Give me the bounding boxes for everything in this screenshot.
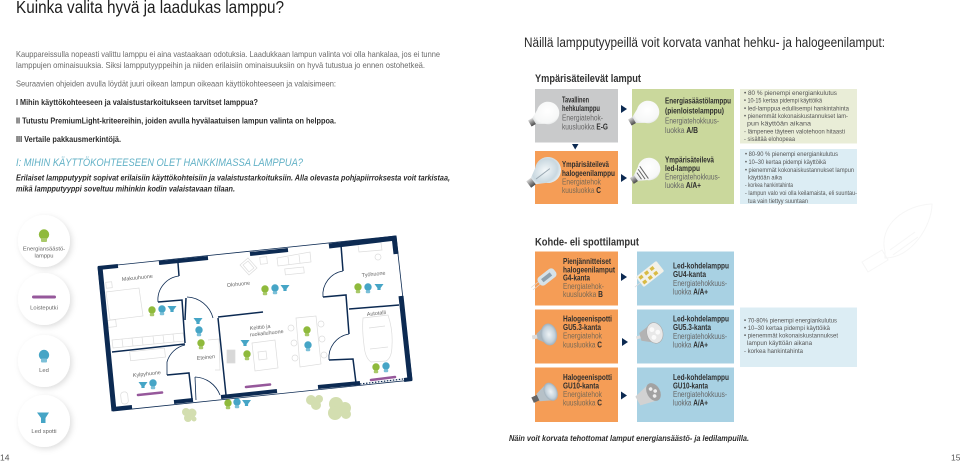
intro text block: [16, 49, 440, 88]
panel: incandescent: kuusluokka E-G: [562, 122, 608, 132]
room labels: Eteinen: [197, 354, 215, 362]
callout: energy saving pros and cons: • 80 % pienempi energiankulutus: [744, 90, 838, 97]
panel: efficient omnidirectional lamps: Energiatehokkuus-: [665, 172, 720, 182]
intro text block: Kauppareissulla nopeasti valittu lamppu ei aina vastaakaan odotuksia. Laadukkaan lampun valinta voi olla hankalaa, jos ei tunne: [16, 49, 440, 59]
section heading: I: MIHIN KÄYTTÖKOHTEESEEN OLET HANKKIMASSA LAMPPUA?: [16, 157, 304, 169]
panel: G4 led: Energiatehokkuus-: [673, 279, 727, 288]
panel: G4 led: [630, 252, 734, 306]
legend: led spot: Led spotti: [31, 429, 57, 435]
legend: [18, 215, 70, 447]
panel: efficient omnidirectional lamps: Ympärisäteilevä: [665, 156, 714, 164]
shrubs: [182, 395, 351, 422]
section intro: Erilaiset lampputyypit sopivat erilaisiin käyttökohteisiin ja valaistustarkoituksiin. Alla olevasta pohjapiirroksesta voit tarkistaa,: [16, 172, 450, 182]
callout: energy saving pros and cons: - lämpenee täyteen valotehoon hitaasti: [744, 128, 845, 136]
callout: energy saving pros and cons: • led-lamppua edullisempi hankintahinta: [744, 106, 849, 112]
panel: halogen: Energiatehok: [562, 178, 602, 186]
subheading: spot lamps: Kohde- eli spottilamput: [535, 236, 639, 248]
thick wall segments: [98, 236, 412, 411]
legend: led spot: [18, 395, 70, 447]
callout: spot led pros and cons: • 70-80% pienempi energiankulutus: [744, 318, 838, 324]
panel: GU10 halogen: GU10-kanta: [563, 382, 599, 390]
faint bulb outline: [862, 204, 932, 272]
panel: incandescent: hehkulamppu: [562, 104, 600, 113]
room labels: Kylpyhuone: [133, 370, 161, 379]
steps list: III Vertaile pakkausmerkintöjä.: [16, 134, 121, 144]
panel: G4 halogen: kuusluokka B: [563, 290, 603, 299]
panel: GU10 led: GU10-kanta: [673, 382, 708, 390]
legend: energy saving lamp: lamppu: [34, 254, 54, 260]
closing note: Näin voit korvata tehottomat lamput energiansäästö- ja ledilampuilla.: [509, 433, 749, 443]
panel: GU5.3 halogen: [530, 310, 618, 364]
panel: efficient omnidirectional lamps: luokka A/A+: [665, 181, 701, 190]
callout: energy saving pros and cons: • pienemmät kokonaiskustannukset lam-: [744, 113, 848, 120]
panel: GU5.3 halogen: Energiatehok: [563, 332, 603, 340]
panel: GU10 led: luokka A/A+: [673, 398, 708, 408]
panel: GU10 led: [633, 368, 734, 422]
panel: G4 led: GU4-kanta: [673, 270, 706, 279]
room labels: ruokailuhuone: [250, 329, 284, 338]
panel: incandescent: Energiatehok-: [562, 114, 603, 122]
legend: led: [18, 335, 70, 387]
icon: GU5.3 spot: [530, 322, 559, 348]
legend: fluorescent tube: Loisteputki: [30, 306, 58, 312]
icon: incandescent bulb: [524, 98, 563, 133]
panel: incandescent: Tavallinen: [562, 96, 589, 104]
callout: led pros and cons: • 10–30 kertaa pidempi käyttöikä: [745, 159, 826, 166]
legend: energy saving lamp: Energiansäästö-: [23, 246, 65, 252]
panel: GU5.3 halogen: kuusluokka C: [563, 340, 602, 350]
callout: energy saving pros and cons: - sisältää elohopeaa: [744, 136, 795, 143]
panel: GU5.3 led: GU5.3-kanta: [673, 323, 711, 332]
section intro: [16, 172, 450, 194]
panel: efficient omnidirectional lamps: [624, 89, 734, 204]
callout: led pros and cons: [740, 149, 857, 205]
panel: G4 led: luokka A/A+: [673, 288, 708, 296]
callout: led pros and cons: käyttöän aika: [748, 174, 782, 182]
room labels: Työhuone: [362, 271, 386, 279]
callout: led pros and cons: • 80-90 % pienempi energiankulutus: [745, 151, 839, 158]
intro text block: lamppujen ominaisuuksia. Siksi lampputyyppeihin ja niiden erilaisiin ominaisuuksiin on hyvä tutustua jo ennen ostohetkeä.: [16, 60, 425, 70]
icon: led bulb: [625, 153, 665, 190]
panel: efficient omnidirectional lamps: Energiasäästölamppu: [665, 96, 731, 106]
icon: GU10 spot: [529, 380, 561, 409]
steps list: II Tutustu PremiumLight-kriteereihin, joiden avulla hyvälaatuisen lampun valinta on helppoa.: [16, 116, 336, 126]
room labels: Olohuone: [227, 281, 250, 289]
callout: energy saving pros and cons: pun käyttöän aikana: [747, 120, 811, 128]
panel: GU5.3 led: [634, 310, 734, 364]
panel: G4 led: Led-kohdelamppu: [673, 262, 729, 270]
icon: G4 capsule: [529, 267, 558, 293]
steps list: [16, 97, 336, 144]
plan lamp markers: [138, 283, 395, 409]
panel: halogen: Ympärisäteilevä: [562, 160, 609, 169]
panel: efficient omnidirectional lamps: led-lamppu: [665, 164, 700, 173]
door arcs: [158, 271, 349, 400]
panel: halogen: kuusluokka C: [562, 186, 601, 195]
icon: G4 led: [630, 261, 664, 291]
panel: GU10 halogen: Energiatehok: [563, 390, 603, 399]
callout: led pros and cons: - korkea hankintahinta: [745, 182, 793, 189]
callout: energy saving pros and cons: [740, 89, 857, 144]
heading: replacement lamps: Näillä lampputyypeillä voit korvata vanhat hehku- ja halogeenilamput:: [524, 35, 885, 50]
panel: halogen: [521, 151, 618, 204]
room labels: Makuuhuone: [122, 274, 153, 283]
panel: efficient omnidirectional lamps: Energiatehokkuus-: [665, 116, 719, 126]
panel: G4 halogen: G4-kanta: [563, 274, 590, 282]
room labels: Keittiö ja: [250, 324, 271, 332]
callout: spot led pros and cons: lampun käyttöän aikana: [747, 340, 812, 347]
callout: spot led pros and cons: • 10–30 kertaa pidempi käyttöikä: [744, 325, 830, 332]
floor plan: [98, 236, 412, 422]
panel: GU5.3 halogen: Halogeenispotti: [563, 314, 612, 324]
arrows: omnidirectional: [572, 105, 627, 182]
panel: G4 halogen: [529, 252, 618, 306]
panel: incandescent: [524, 89, 618, 142]
panel: GU10 led: Led-kohdelamppu: [673, 373, 729, 382]
callout: led pros and cons: tua vain tiettyy suuntaan: [748, 198, 808, 205]
icon: GU5.3 led: [634, 321, 665, 348]
callout: spot led pros and cons: [740, 308, 857, 367]
panel: GU10 halogen: [529, 368, 618, 422]
callout: energy saving pros and cons: • 10-15 kertaa pidempi käyttöikä: [744, 98, 822, 104]
panel: efficient omnidirectional lamps: luokka A/B: [665, 126, 698, 135]
panel: G4 halogen: halogeenilamput: [563, 266, 615, 274]
outer thin walls: [98, 236, 412, 411]
callout: led pros and cons: - lampun valo voi olla keilamaista, eli suuntau-: [745, 190, 857, 197]
arrows: spot lamps: [621, 273, 628, 400]
panel: GU5.3 led: Led-kohdelamppu: [673, 314, 729, 324]
panel: GU5.3 led: Energiatehokkuus-: [673, 332, 727, 341]
interior walls: [112, 245, 399, 399]
callout: led pros and cons: • pienemmät kokonaiskustannukset lampun: [745, 167, 854, 174]
subheading: omnidirectional lamps: Ympärisäteilevät lamput: [535, 73, 641, 85]
panel: GU5.3 led: luokka A/A+: [673, 340, 708, 350]
panel: GU10 halogen: kuusluokka C: [563, 398, 602, 408]
panel: halogen: halogeenilamppu: [562, 169, 615, 178]
intro text block: Seuraavien ohjeiden avulla löydät juuri oikean lampun oikeaan käyttökohteeseen ja valaisimeen:: [16, 78, 336, 88]
legend: energy saving lamp: [18, 215, 70, 267]
furniture: [106, 243, 392, 404]
icon: halogen bulb: [521, 152, 566, 195]
panel: G4 halogen: Pienjännitteiset: [563, 257, 611, 266]
panel: GU10 led: Energiatehokkuus-: [673, 390, 727, 399]
panel: efficient omnidirectional lamps: (pienloistelamppu): [665, 106, 724, 116]
legend: fluorescent tube: [18, 273, 70, 325]
room labels: Autotalli: [367, 310, 386, 318]
section intro: mikä lampputyyppi soveltuu mihinkin kodin valaistavaan tilaan.: [16, 184, 235, 194]
callout: spot led pros and cons: - korkea hankintahinta: [744, 348, 803, 355]
icon: energy saving bulb: [624, 97, 663, 132]
panel: GU10 halogen: Halogeenispotti: [563, 373, 612, 382]
icon: GU10 led: [633, 381, 664, 409]
legend: led: Led: [39, 368, 49, 374]
panel: G4 halogen: Energiatehok-: [563, 282, 604, 291]
steps list: I Mihin käyttökohteeseen ja valaistustarkoitukseen tarvitset lamppua?: [16, 97, 258, 107]
room labels: [122, 271, 386, 379]
garage door: [360, 379, 403, 384]
callout: spot led pros and cons: • pienemmät kokonaiskustannukset: [744, 332, 838, 340]
panel: GU5.3 halogen: GU5.3-kanta: [563, 323, 601, 332]
